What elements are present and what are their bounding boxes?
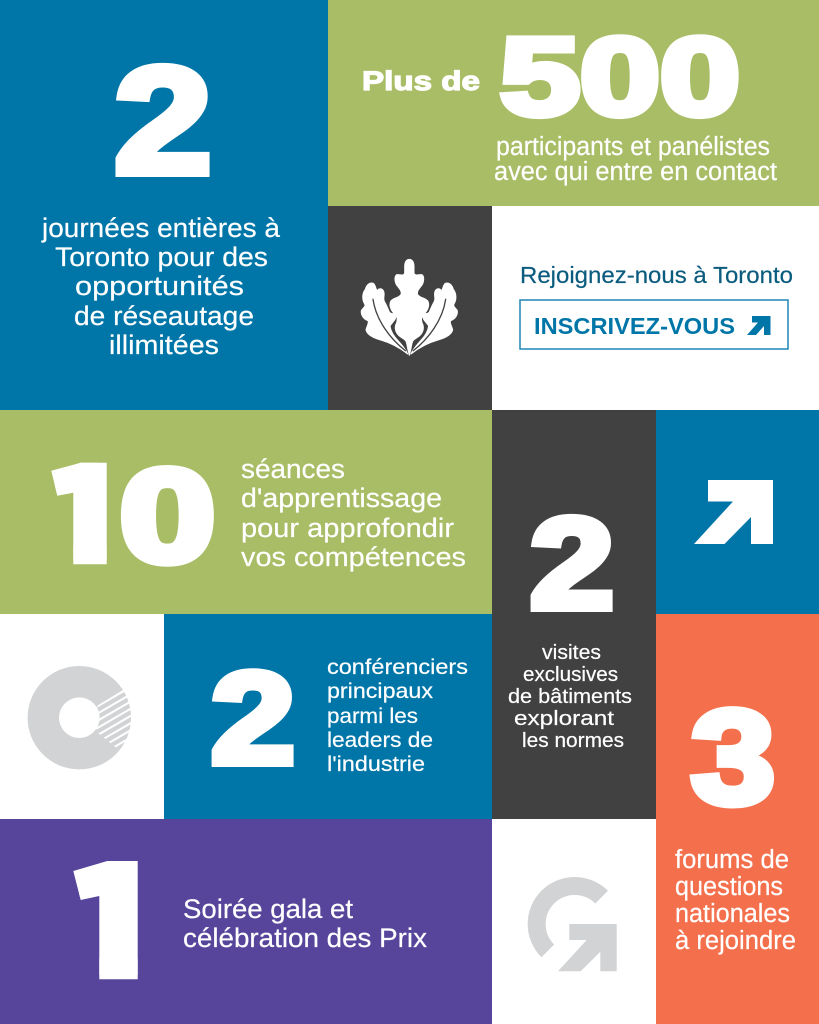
text: forums: à rejoindre	[675, 927, 796, 955]
text: forums	[675, 846, 796, 955]
number: 2: 2	[114, 36, 212, 206]
text: journées entières: illimitées	[109, 330, 219, 360]
icon: G arrow	[537, 886, 617, 971]
panel: 10 séances	[0, 410, 492, 614]
panel: 3 forums	[656, 614, 819, 1024]
text: forums: questions	[675, 873, 783, 901]
icon: large arrow	[694, 480, 773, 544]
text: forums: nationales	[675, 900, 790, 928]
text: visites	[508, 642, 632, 752]
text: conférenciers: conférenciers	[327, 656, 468, 679]
number: 10	[51, 462, 214, 567]
number: 10: 1	[45, 432, 125, 591]
text: journées entières: journées entières à	[41, 213, 281, 243]
number: 500: 500	[500, 16, 740, 138]
number: 1: 1	[68, 826, 158, 1010]
panel: inscription	[492, 206, 819, 410]
text: visites: exclusives	[523, 664, 618, 686]
text: séances: séances	[241, 454, 345, 484]
panel: plus de 500	[328, 0, 819, 206]
text: journées entières: de réseautage	[74, 301, 254, 331]
text: participants	[494, 133, 777, 186]
button: inscrivez-vous: INSCRIVEZ-VOUS	[534, 313, 735, 339]
text: conférenciers	[327, 656, 468, 776]
icon: oak leaves	[361, 259, 457, 355]
text: visites: les normes	[522, 730, 624, 752]
text: conférenciers: leaders de	[327, 729, 433, 752]
text: séances	[241, 454, 466, 572]
panel: blue arrow	[656, 410, 819, 614]
number: 2: 2	[211, 645, 295, 791]
text: journées entières: opportunités	[75, 271, 244, 301]
number: 2: 2	[530, 492, 614, 636]
text: soirée gala: Soirée gala et	[183, 894, 353, 924]
text: participants: avec qui entre en contact	[494, 158, 777, 186]
icon: striped circle	[28, 666, 140, 769]
panel: 2 conférenciers	[164, 614, 492, 819]
text: séances: pour approfondir	[241, 513, 454, 543]
text: conférenciers: parmi les	[327, 705, 418, 728]
text: séances: d'apprentissage	[241, 483, 442, 513]
icon: small arrow	[747, 316, 770, 335]
number: 10: 0	[120, 442, 215, 589]
panel: G logo	[492, 819, 656, 1024]
text: soirée gala: célébration des Prix	[183, 923, 428, 953]
panel: oak leaf logo	[328, 206, 492, 410]
text: soirée gala	[183, 894, 428, 953]
text: visites: visites	[542, 642, 601, 664]
heading: Rejoignez-nous: Rejoignez-nous à Toronto	[520, 262, 793, 288]
panel: 2 visites	[492, 410, 656, 819]
panel: C logo	[28, 666, 131, 770]
text: visites: explorant	[514, 708, 615, 730]
button: inscrivez-vous	[520, 300, 788, 349]
panel: 1 soirée gala	[0, 819, 492, 1024]
text: journées entières	[41, 213, 281, 360]
text: conférenciers: l'industrie	[327, 753, 425, 776]
panel: 2 journées	[0, 0, 328, 410]
text: visites: de bâtiments	[508, 686, 632, 708]
text: journées entières: Toronto pour des	[55, 242, 268, 272]
text: participants: participants et panélistes	[496, 133, 770, 161]
text: forums: forums de	[675, 846, 789, 874]
number: 3: 3	[691, 684, 775, 832]
text: conférenciers: principaux	[327, 680, 434, 703]
text: séances: vos compétences	[241, 542, 466, 572]
label: Plus de: Plus de	[362, 66, 480, 96]
